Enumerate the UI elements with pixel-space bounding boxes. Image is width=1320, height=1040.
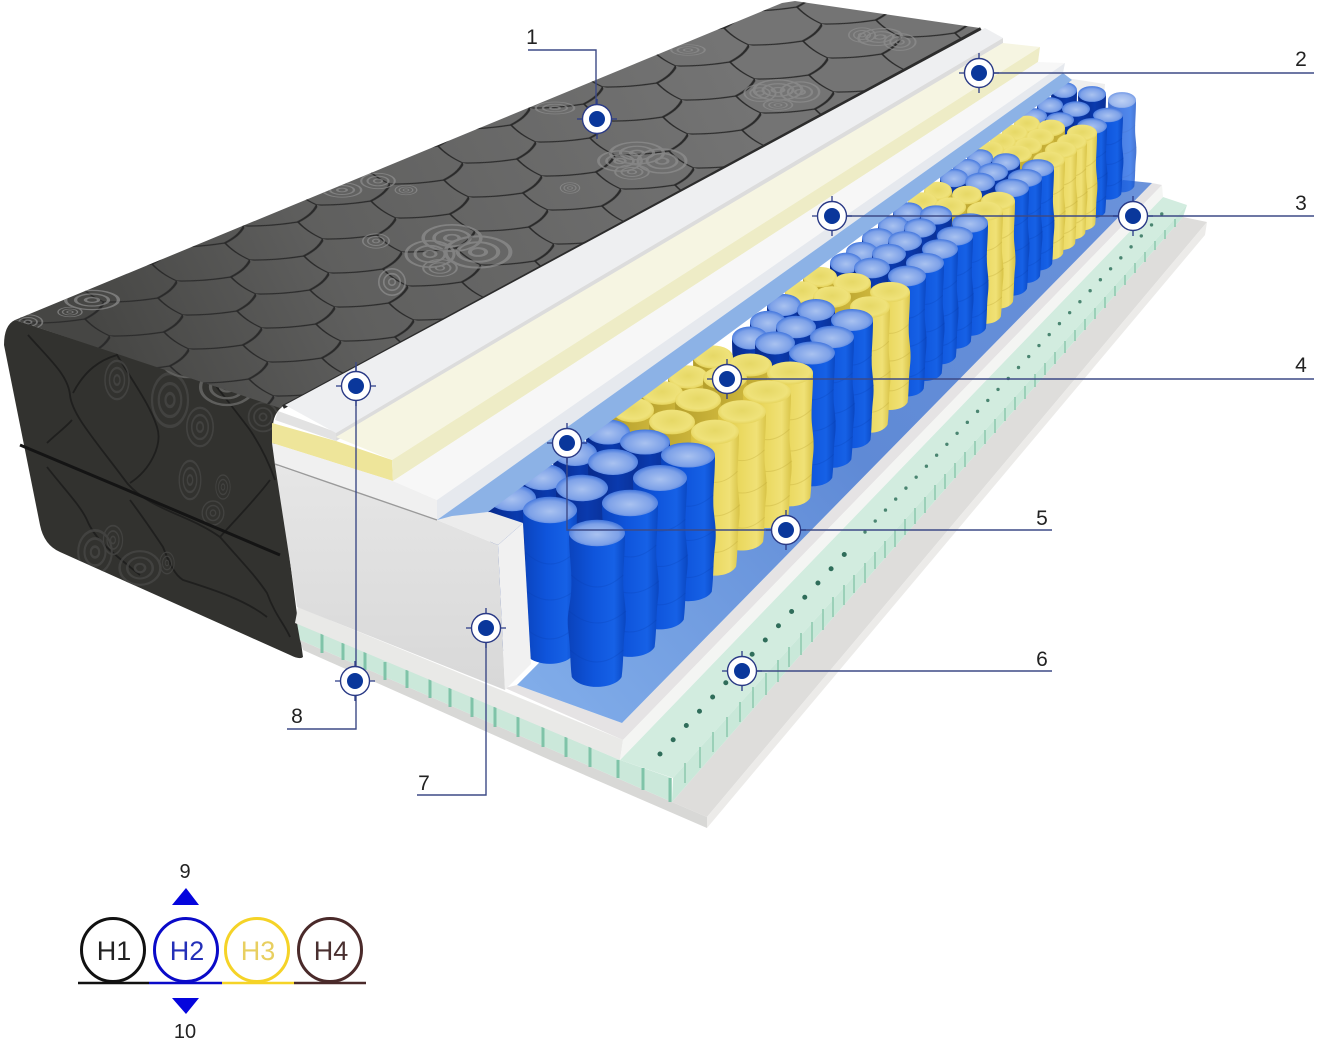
pocket springs block xyxy=(487,82,1137,687)
callout line 1 xyxy=(528,50,596,119)
piping cord xyxy=(20,445,280,555)
middle blue spring zone xyxy=(731,294,874,486)
H2 badge xyxy=(149,918,222,983)
label 6: 6 xyxy=(1036,648,1048,671)
callout line 8 xyxy=(287,362,356,729)
far blue spring zone xyxy=(1020,82,1137,218)
marker 5 lower xyxy=(766,510,806,550)
yellow memory foam layer xyxy=(272,43,1040,481)
label 1: 1 xyxy=(526,26,538,49)
label 2: 2 xyxy=(1295,48,1307,71)
callout line 7 xyxy=(417,628,486,795)
mattress cover top surface xyxy=(14,1,981,408)
top white foam layer xyxy=(275,28,1003,441)
callout line 6 xyxy=(742,670,1052,672)
H2 badge: H2 xyxy=(170,936,204,966)
light blue base fabric xyxy=(517,180,1152,723)
label 5: 5 xyxy=(1036,507,1048,530)
callout line 2 xyxy=(979,72,1314,74)
arrow up xyxy=(172,888,199,905)
H3 badge xyxy=(222,918,294,983)
front blue spring zone xyxy=(487,419,716,687)
marker 7 xyxy=(466,608,506,648)
marker 4 xyxy=(707,359,747,399)
H1 badge: H1 xyxy=(97,936,131,966)
H4 badge xyxy=(294,918,366,983)
arrow down xyxy=(172,998,199,1014)
callout line 4 xyxy=(727,378,1314,380)
second blue spring zone xyxy=(829,202,989,397)
marker 8 upper xyxy=(336,366,376,406)
H1 badge xyxy=(78,918,149,983)
white lower foam layer xyxy=(295,183,1163,760)
marker 1 xyxy=(577,99,617,139)
label 4: 4 xyxy=(1295,354,1307,377)
grey bottom foam layer xyxy=(300,217,1207,828)
white foam front block xyxy=(275,465,531,690)
H4 badge: H4 xyxy=(314,936,348,966)
callout line 5 xyxy=(567,443,1052,530)
mint perforated foam layer xyxy=(297,197,1187,802)
white middle foam layer xyxy=(272,62,1065,520)
front yellow spring zone xyxy=(612,346,814,576)
label 9: 9 xyxy=(179,861,191,883)
label 8: 8 xyxy=(291,705,303,728)
marker 5 upper xyxy=(547,423,587,463)
third yellow spring zone xyxy=(908,182,1016,324)
mattress cover side panel xyxy=(4,320,303,658)
label 3: 3 xyxy=(1295,192,1307,215)
far rail xyxy=(1060,78,1105,96)
label 7: 7 xyxy=(418,772,430,795)
marker 3 left xyxy=(812,196,852,236)
marker 3 right xyxy=(1113,196,1153,236)
far yellow spring zone xyxy=(978,116,1098,260)
marker 8 lower xyxy=(335,661,375,701)
H3 badge: H3 xyxy=(241,936,275,966)
firmness legend xyxy=(78,861,366,1040)
third blue spring zone xyxy=(939,149,1055,296)
marker 2 xyxy=(959,53,999,93)
marker 6 xyxy=(722,651,762,691)
light blue fabric band xyxy=(437,73,1072,520)
second yellow spring zone xyxy=(785,267,911,433)
callout line 3 xyxy=(832,215,1314,217)
